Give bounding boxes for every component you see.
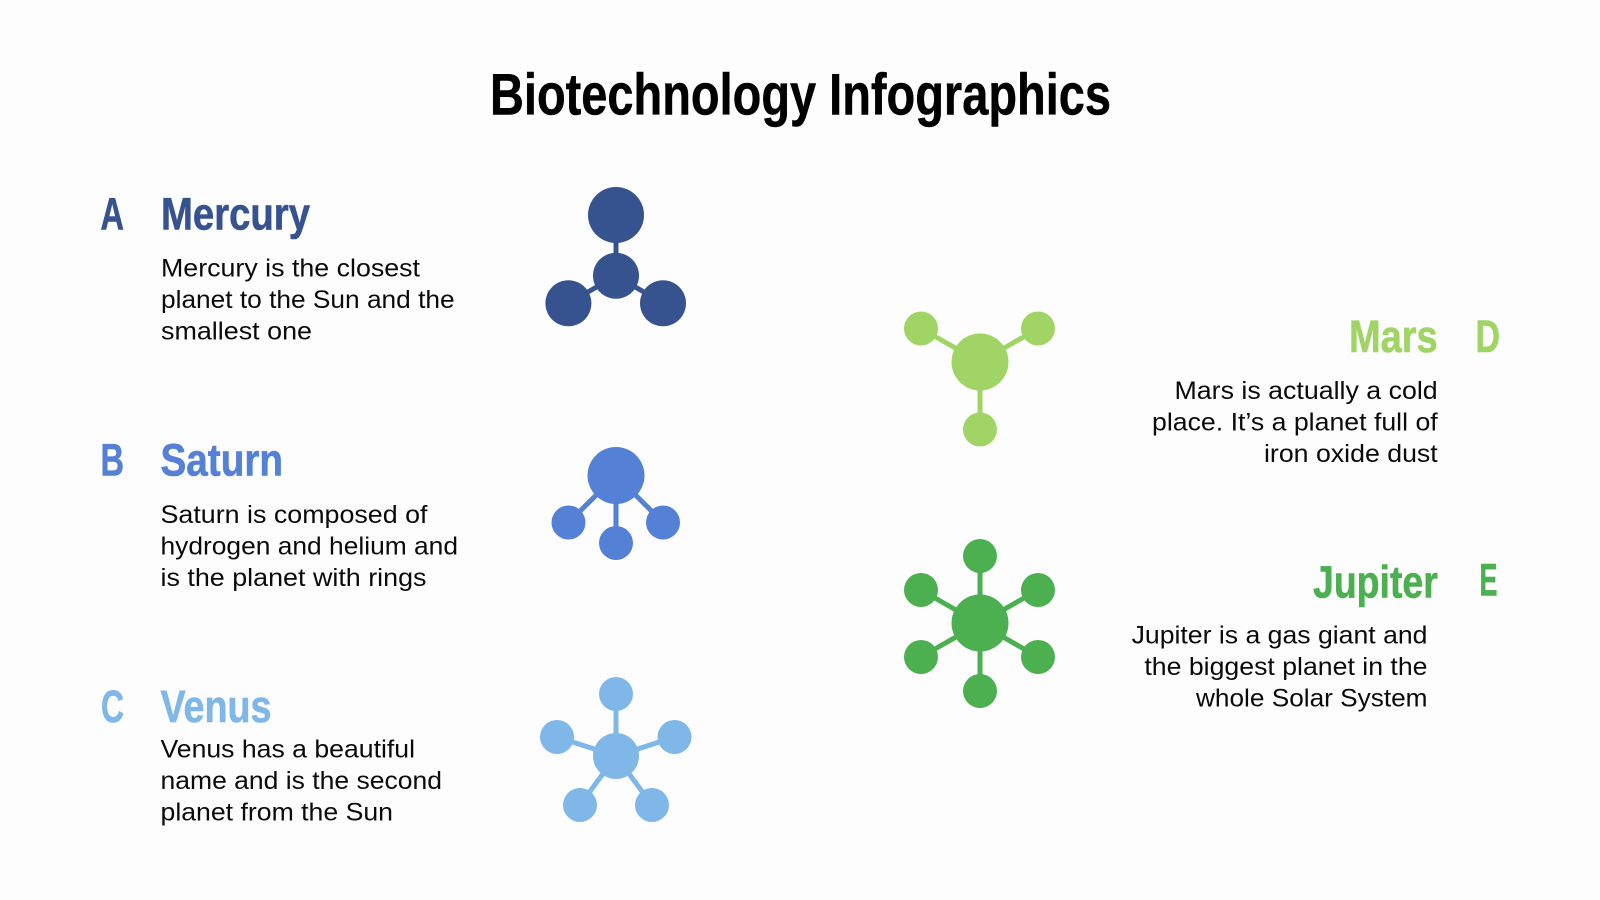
text: Mercury description: smallest one (161, 318, 312, 346)
letter E: E (1480, 555, 1498, 606)
panel: Mars (904, 311, 1500, 468)
heading: Saturn: Saturn (160, 434, 283, 486)
text: Jupiter description (1132, 621, 1428, 713)
letter C: C (101, 681, 124, 732)
letter B: B (100, 434, 124, 486)
text: Mercury description (161, 254, 455, 346)
text: Mars description: Mars is actually a cold (1174, 377, 1438, 405)
text: Mars description: place. It’s a planet full of (1152, 408, 1438, 436)
icon: molecule B (552, 447, 680, 560)
text: Saturn description: hydrogen and helium and (160, 532, 458, 560)
letter A: A (100, 188, 124, 240)
text: Mercury description: planet to the Sun and the (161, 286, 455, 314)
text: Jupiter description: whole Solar System (1195, 685, 1428, 713)
text: Saturn description: Saturn is composed of (160, 501, 428, 529)
icon: molecule E (904, 539, 1055, 708)
icon: molecule C (540, 677, 692, 822)
letter D: D (1476, 311, 1500, 362)
heading: Mercury: Mercury (161, 188, 310, 240)
icon: molecule A (545, 187, 686, 326)
heading: Venus: Venus (160, 681, 272, 732)
text: Venus description: name and is the second (160, 767, 442, 795)
panel: Venus (101, 677, 692, 827)
text: Jupiter description: Jupiter is a gas giant and (1132, 621, 1428, 649)
heading: Jupiter: Jupiter (1313, 556, 1438, 608)
text: Venus description: planet from the Sun (160, 799, 393, 827)
panel: Jupiter (904, 539, 1498, 713)
text: Saturn description (160, 501, 458, 592)
text: Venus description (160, 735, 442, 827)
text: Jupiter description: the biggest planet in the (1144, 653, 1428, 681)
icon: molecule D (904, 312, 1055, 446)
text: Mercury description: Mercury is the closest (161, 254, 420, 282)
text: Venus description: Venus has a beautiful (160, 735, 415, 763)
text: Saturn description: is the planet with rings (160, 564, 426, 592)
title: Biotechnology Infographics (490, 62, 1111, 128)
heading: Mars: Mars (1349, 311, 1438, 362)
panel: Mercury (100, 187, 686, 346)
text: Mars description (1152, 377, 1438, 468)
panel: Saturn (100, 434, 680, 592)
text: Mars description: iron oxide dust (1264, 440, 1438, 468)
